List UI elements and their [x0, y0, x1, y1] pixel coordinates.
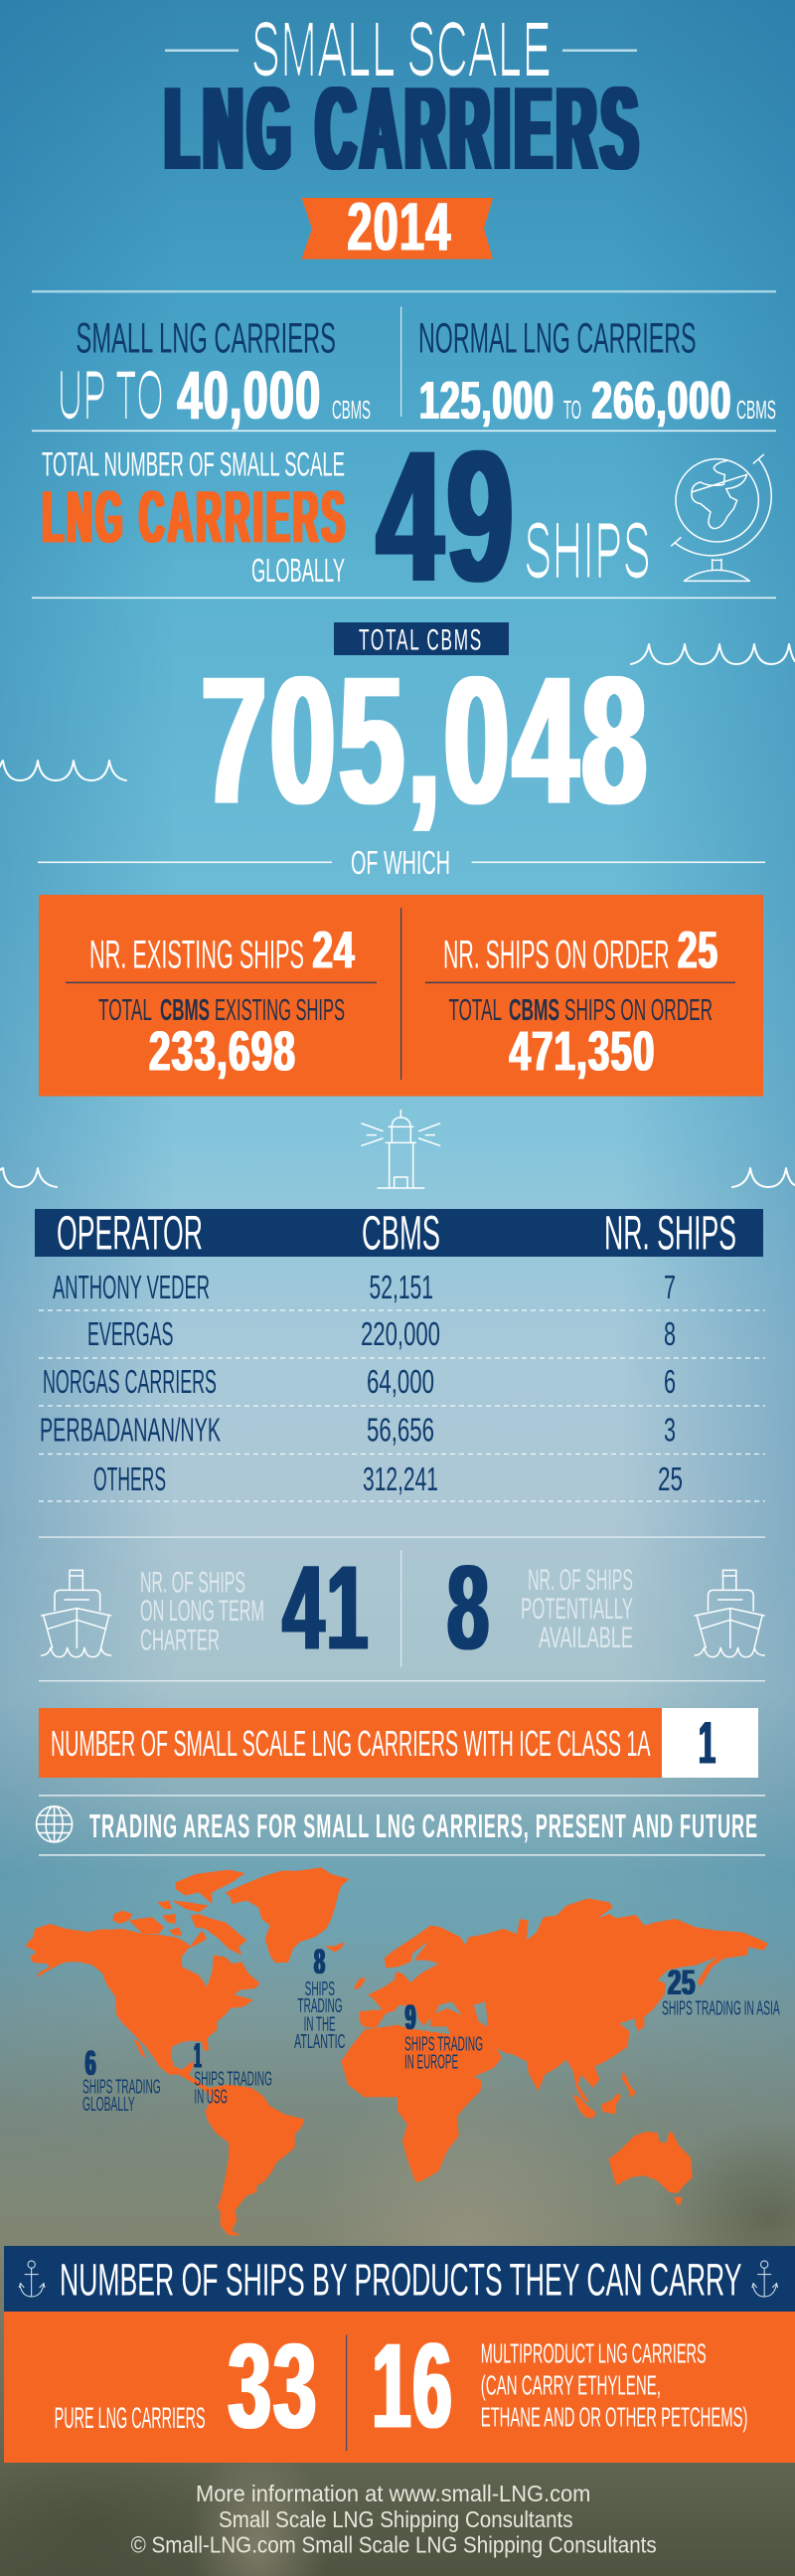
map label: atlantic: 8	[314, 1942, 325, 1981]
panel: existing and on order: TOTAL	[449, 993, 502, 1027]
row: others	[93, 1461, 683, 1498]
operator table	[35, 1207, 765, 1501]
panel: total ships: SHIPS	[524, 505, 651, 595]
of which divider: OF WHICH	[351, 844, 450, 881]
waves lower left	[0, 1168, 57, 1187]
map label: europe: IN EUROPE	[404, 2052, 458, 2074]
panel: carrier sizes: UP TO	[58, 357, 164, 433]
southeast asia islands	[573, 2071, 636, 2119]
map label: asia	[662, 1963, 780, 2020]
row: anthony veder: 7	[664, 1270, 676, 1306]
map label: atlantic: TRADING	[298, 1995, 342, 2017]
greenland	[226, 1867, 350, 1963]
panel: total ships	[32, 412, 776, 620]
panel: existing and on order: 25	[678, 922, 718, 980]
map label: globally: SHIPS TRADING	[82, 2076, 161, 2098]
panel: existing and on order: EXISTING SHIPS	[215, 993, 345, 1027]
panel: charter and available: AVAILABLE	[539, 1622, 633, 1654]
panel: carrier sizes	[32, 290, 776, 433]
panel: existing and on order: 24	[312, 922, 356, 980]
row: anthony veder: 52,151	[370, 1270, 433, 1306]
panel: charter and available: 41	[282, 1539, 370, 1674]
panel: total ships: GLOBALLY	[251, 552, 345, 589]
panel: ice class	[39, 1708, 758, 1778]
icon: ship left	[42, 1570, 111, 1657]
panel: charter and available: POTENTIALLY	[521, 1593, 633, 1626]
map label: atlantic: ATLANTIC	[294, 2031, 345, 2053]
operator table: CBMS	[362, 1207, 440, 1261]
row: perbadanan/nyk	[40, 1412, 676, 1450]
footer: © Small-LNG.com Small Scale LNG Shipping Consultants	[131, 2531, 657, 2557]
arctic islands	[112, 1870, 246, 2058]
year ribbon: 2014	[348, 189, 451, 264]
map label: atlantic	[294, 1942, 345, 2053]
panel: ships by products: PURE LNG CARRIERS	[55, 2402, 206, 2435]
panel: ice class: 1	[699, 1710, 716, 1777]
eurasia	[360, 1898, 768, 2103]
row: evergas	[87, 1316, 676, 1353]
panel: existing and on order: 471,350	[509, 1020, 656, 1084]
panel: charter and available: ON LONG TERM	[140, 1595, 264, 1628]
footer: Small Scale LNG Shipping Consultants	[219, 2506, 572, 2532]
panel: total ships: TOTAL NUMBER OF SMALL SCALE	[42, 445, 345, 483]
world map	[26, 1867, 768, 2235]
row: evergas: EVERGAS	[87, 1316, 173, 1353]
panel: existing and on order: TOTAL	[98, 993, 152, 1027]
title: SMALL SCALE	[250, 7, 552, 92]
total cbms label	[334, 622, 509, 656]
row: norgas carriers	[43, 1364, 676, 1401]
panel: charter and available: 8	[447, 1539, 489, 1674]
row: perbadanan/nyk: 56,656	[367, 1412, 434, 1450]
panel: total ships: LNG CARRIERS	[42, 476, 348, 559]
row: norgas carriers: 64,000	[367, 1364, 434, 1401]
row: anthony veder	[53, 1270, 676, 1306]
panel: existing and on order: CBMS	[509, 993, 559, 1027]
map label: europe: 9	[405, 1997, 415, 2037]
panel: charter and available: CHARTER	[140, 1624, 220, 1656]
map label: usg: 1	[194, 2036, 201, 2076]
map label: atlantic: IN THE	[304, 2013, 336, 2035]
row: norgas carriers: NORGAS CARRIERS	[43, 1364, 217, 1401]
icon: anchor left	[19, 2261, 45, 2297]
panel: existing and on order: NR. EXISTING SHIPS	[89, 934, 304, 977]
row: others: OTHERS	[93, 1461, 166, 1498]
panel: carrier sizes: 266,000	[592, 371, 731, 430]
panel: charter and available: NR. OF SHIPS	[140, 1566, 245, 1599]
north america	[26, 1924, 260, 2091]
row: evergas: 8	[664, 1316, 676, 1353]
panel: ships by products: 33	[229, 2318, 318, 2454]
iceland and ireland	[325, 1942, 366, 1990]
panel: charter and available	[39, 1536, 765, 1681]
panel: carrier sizes: 40,000	[177, 357, 322, 433]
row: perbadanan/nyk: PERBADANAN/NYK	[40, 1412, 221, 1450]
panel: ships by products: 16	[372, 2318, 453, 2454]
icon: anchor right	[752, 2261, 777, 2297]
panel: carrier sizes: SMALL LNG CARRIERS	[76, 316, 336, 363]
footer: More information at www.small-LNG.com	[196, 2481, 590, 2506]
row: others: 25	[658, 1461, 683, 1498]
icon: globe	[672, 454, 771, 581]
map label: globally: GLOBALLY	[82, 2094, 135, 2116]
row: evergas: 220,000	[361, 1316, 440, 1353]
map label: usg: IN USG	[194, 2086, 228, 2108]
waves lower right	[732, 1168, 795, 1187]
south america	[194, 2080, 305, 2235]
waves left	[0, 761, 126, 780]
panel: existing and on order	[39, 895, 763, 1097]
map label: europe	[404, 1997, 483, 2074]
row: anthony veder: ANTHONY VEDER	[53, 1270, 210, 1306]
map label: atlantic: SHIPS	[305, 1978, 335, 2000]
map label: usg: SHIPS TRADING	[194, 2069, 272, 2091]
footer	[131, 2481, 657, 2557]
total cbms label: TOTAL CBMS	[359, 623, 483, 656]
panel: total ships: 49	[377, 412, 517, 620]
panel: existing and on order: 233,698	[149, 1020, 296, 1084]
icon: lighthouse	[362, 1111, 440, 1188]
row: perbadanan/nyk: 3	[664, 1412, 676, 1450]
africa	[341, 2025, 482, 2182]
map label: globally	[82, 2043, 161, 2116]
map label: asia: 25	[668, 1963, 696, 2002]
panel: existing and on order: CBMS	[160, 993, 210, 1027]
map label: europe: SHIPS TRADING	[404, 2033, 483, 2055]
icon: ship right	[695, 1570, 764, 1657]
waves right	[631, 644, 795, 664]
panel: carrier sizes: TO	[563, 395, 581, 425]
panel: carrier sizes: 125,000	[419, 371, 555, 430]
australia	[608, 2132, 693, 2205]
operator table: OPERATOR	[57, 1207, 203, 1261]
map label: globally: 6	[85, 2043, 95, 2083]
heading: trading areas	[37, 1795, 765, 1856]
title	[165, 7, 643, 195]
panel: ships by products	[4, 2312, 795, 2463]
row: norgas carriers: 6	[664, 1364, 676, 1401]
panel: carrier sizes: CBMS	[332, 395, 371, 425]
map label: usg	[194, 2036, 272, 2108]
row: others: 312,241	[363, 1461, 438, 1498]
panel: charter and available: NR. OF SHIPS	[528, 1564, 633, 1597]
